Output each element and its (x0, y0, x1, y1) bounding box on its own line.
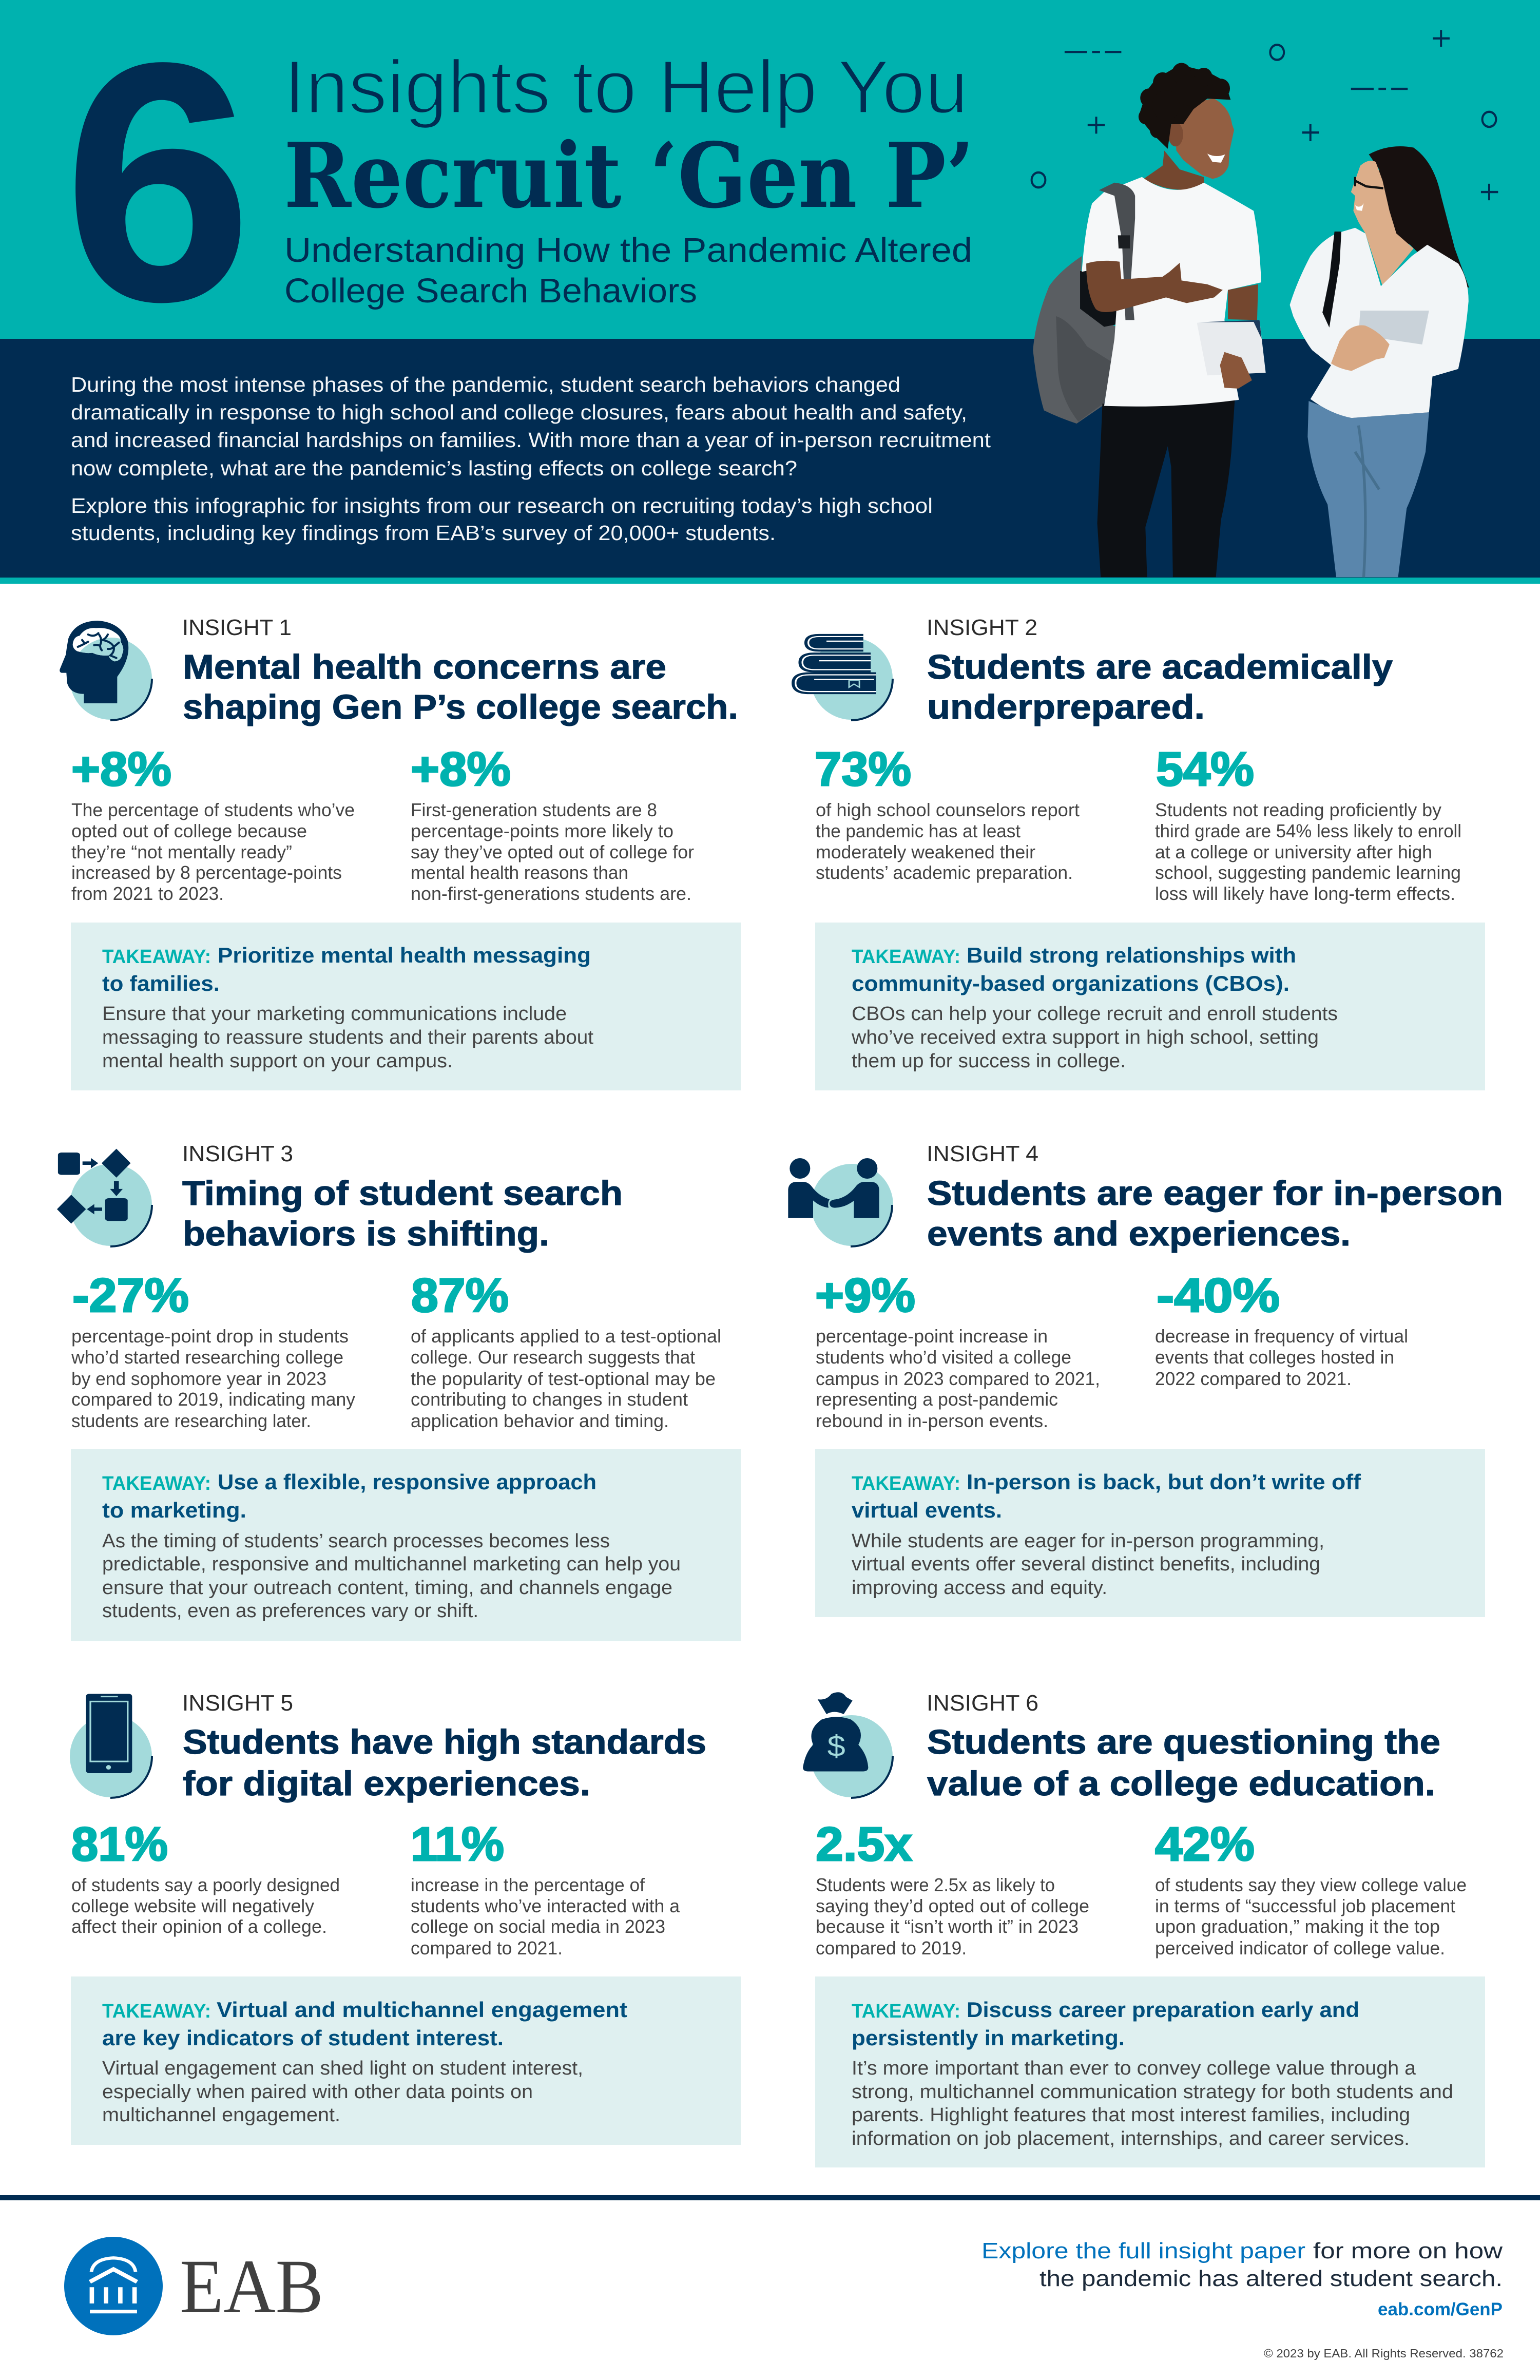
intro paragraph 1 (71, 373, 991, 480)
stat 2 description: compared to 2021. (411, 1937, 563, 1959)
stat 1: 81% (71, 1817, 168, 1871)
stat 2 (411, 742, 694, 904)
takeaway box: TAKEAWAY: (102, 946, 211, 968)
decorative marks (1032, 30, 1498, 248)
stat 2: 42% (1155, 1817, 1255, 1871)
heading: Students have high standards (183, 1723, 706, 1761)
intro paragraph 1: now complete, what are the pandemic’s lasting effects on college search? (71, 456, 797, 480)
panel: insight 5 (70, 1691, 741, 2145)
stat 2 description: 2022 compared to 2021. (1155, 1368, 1352, 1389)
takeaway box: As the timing of students’ search processes becomes less (102, 1530, 610, 1552)
heading (183, 648, 738, 726)
title line 1: Insights to Help You (284, 45, 968, 129)
takeaway box: them up for success in college. (852, 1050, 1126, 1072)
stat 2: -40% (1157, 1269, 1280, 1322)
stat 1 description: by end sophomore year in 2023 (71, 1368, 326, 1389)
stat 1 description: saying they’d opted out of college (816, 1895, 1089, 1916)
takeaway box: virtual events. (852, 1498, 1002, 1522)
stat 1 description: who’d started researching college (71, 1347, 343, 1368)
heading: underprepared. (927, 688, 1205, 726)
heading (183, 1723, 706, 1803)
takeaway box: It’s more important than ever to convey college value through a (852, 2058, 1416, 2079)
heading (182, 1174, 623, 1253)
stat 2 description (411, 799, 694, 904)
takeaway box (815, 1449, 1485, 1617)
stat 2 description (411, 1326, 721, 1431)
woman (1290, 146, 1469, 577)
footer call to action: Explore the full insight paper (981, 2238, 1305, 2263)
takeaway box (71, 923, 741, 1090)
takeaway box (815, 1976, 1485, 2167)
stat 2: 54% (1156, 742, 1254, 796)
takeaway box: Virtual engagement can shed light on student interest, (102, 2058, 583, 2079)
takeaway box: Prioritize mental health messaging (218, 943, 591, 967)
stat 2 description: mental health reasons than (411, 862, 628, 883)
heading: value of a college education. (927, 1764, 1435, 1803)
big numeral 6: 6 (64, 0, 252, 371)
intro paragraph 1: and increased financial hardships on families. With more than a year of in-person recruitment (71, 428, 991, 452)
stat 1 description (71, 1326, 355, 1431)
intro paragraph 2: Explore this infographic for insights from our research on recruiting today’s high school (71, 494, 933, 517)
stat 1 (71, 1817, 340, 1937)
subtitle (284, 231, 972, 310)
panel: insight 6 (803, 1691, 1485, 2167)
heading: behaviors is shifting. (183, 1215, 549, 1253)
heading (927, 1174, 1503, 1253)
takeaway box (71, 1449, 741, 1641)
footer call to action: for more on how (1313, 2238, 1503, 2263)
stat 1 description: Students were 2.5x as likely to (816, 1874, 1055, 1895)
stat 1 description: the pandemic has at least (816, 820, 1021, 841)
footer call to action: the pandemic has altered student search. (1040, 2266, 1503, 2291)
icon: money bag (803, 1692, 893, 1798)
stat 1 description: students’ academic preparation. (816, 862, 1073, 883)
stat 1 (71, 1269, 355, 1431)
title line 2: Recruit ‘Gen P’ (284, 124, 974, 228)
link: eab.com/GenP (1378, 2299, 1503, 2319)
stat 2 description (1155, 1326, 1408, 1389)
stat 2 description: First-generation students are 8 (411, 799, 657, 820)
stat 1: +8% (71, 742, 171, 796)
stat 1 description: of students say a poorly designed (71, 1874, 340, 1895)
stat 1 description: students are researching later. (71, 1410, 311, 1431)
heading: events and experiences. (927, 1215, 1351, 1253)
intro panel (0, 339, 1540, 584)
stat 2 description: upon graduation,” making it the top (1155, 1916, 1440, 1937)
icon: handshake (788, 1158, 893, 1246)
copyright: © 2023 by EAB. All Rights Reserved. 38762 (1264, 2347, 1504, 2360)
subtitle: Understanding How the Pandemic Altered (284, 231, 972, 270)
stat 2 description: at a college or university after high (1155, 841, 1432, 862)
stat 1 (815, 1269, 1100, 1431)
stat 2 (1155, 1269, 1408, 1389)
stat 1 (71, 742, 355, 904)
takeaway box: TAKEAWAY: (852, 1473, 960, 1494)
stat 2 description: Students not reading proficiently by (1155, 799, 1441, 820)
icon: head with brain (60, 621, 152, 720)
stat 1 description (816, 799, 1080, 883)
stat 1 description: representing a post-pandemic (816, 1389, 1058, 1410)
intro paragraph 2 (71, 494, 933, 545)
icon: building in blue circle (64, 2237, 163, 2335)
footer call to action (981, 2238, 1503, 2319)
takeaway box: predictable, responsive and multichannel marketing can help you (102, 1553, 681, 1575)
stat 1 description (816, 1326, 1100, 1431)
icon: money bag: $ (827, 1729, 845, 1762)
heading: Students are eager for in-person (927, 1174, 1503, 1213)
icon: flow chart (57, 1149, 152, 1246)
icon: smartphone (70, 1694, 152, 1798)
insight label: INSIGHT 4 (927, 1141, 1038, 1166)
heading (927, 648, 1393, 726)
insight label: INSIGHT 5 (182, 1691, 293, 1716)
insight label: INSIGHT 1 (182, 615, 292, 640)
panel: insight 4 (788, 1141, 1503, 1617)
takeaway box: parents. Highlight features that most interest families, including (852, 2104, 1410, 2126)
takeaway box (71, 1976, 741, 2145)
panel: insight 1 (60, 615, 741, 1090)
stat 1 description: compared to 2019. (816, 1937, 967, 1959)
takeaway box: Build strong relationships with (967, 943, 1296, 967)
stat 2 description: of applicants applied to a test-optional (411, 1326, 721, 1347)
stat 1: +9% (815, 1269, 915, 1322)
insight label: INSIGHT 3 (182, 1141, 293, 1166)
takeaway box: especially when paired with other data points on (102, 2081, 533, 2103)
intro paragraph 2: students, including key findings from EAB’s survey of 20,000+ students. (71, 521, 776, 545)
takeaway box: improving access and equity. (852, 1577, 1107, 1599)
takeaway box: virtual events offer several distinct benefits, including (852, 1553, 1320, 1575)
intro paragraph 1: During the most intense phases of the pandemic, student search behaviors changed (71, 373, 900, 396)
icon: stack of books (792, 634, 893, 720)
stat 1 description: percentage-point drop in students (71, 1326, 349, 1347)
wordmark: EAB (180, 2244, 323, 2329)
man (1033, 63, 1266, 577)
takeaway box: TAKEAWAY: (852, 2001, 960, 2022)
stat 2 description: say they’ve opted out of college for (411, 841, 694, 862)
takeaway box: who’ve received extra support in high school, setting (851, 1027, 1319, 1048)
stat 2: 87% (411, 1269, 509, 1322)
stat 2 description: third grade are 54% less likely to enroll (1155, 820, 1461, 841)
stat 1 (815, 742, 1080, 883)
stat 2 (1155, 742, 1461, 904)
takeaway box: Virtual and multichannel engagement (217, 1998, 627, 2022)
takeaway box: persistently in marketing. (852, 2026, 1125, 2050)
takeaway box: mental health support on your campus. (102, 1050, 453, 1072)
intro paragraph 1: dramatically in response to high school and college closures, fears about health and safety, (71, 400, 967, 424)
takeaway box: are key indicators of student interest. (102, 2026, 504, 2050)
stat 2 description: events that colleges hosted in (1155, 1347, 1394, 1368)
stat 2 description: college. Our research suggests that (411, 1347, 695, 1368)
takeaway box: TAKEAWAY: (102, 1473, 211, 1494)
panel: insight 3 (57, 1141, 741, 1641)
stat 2 (411, 1817, 680, 1959)
stat 2 description (1155, 799, 1461, 904)
stat 1 description: moderately weakened their (816, 841, 1035, 862)
stat 1 description: percentage-point increase in (816, 1326, 1048, 1347)
takeaway box: to families. (102, 971, 220, 995)
stat 2 description: of students say they view college value (1155, 1874, 1467, 1895)
stat 1: -27% (72, 1269, 189, 1322)
heading: shaping Gen P’s college search. (183, 688, 738, 726)
stat 2 description: students who’ve interacted with a (411, 1895, 680, 1916)
heading: Mental health concerns are (183, 648, 666, 686)
photo: two students (1032, 30, 1498, 577)
stat 2 description: the popularity of test-optional may be (411, 1368, 716, 1389)
stat 2 (1155, 1817, 1467, 1959)
stat 1 description: affect their opinion of a college. (71, 1916, 327, 1937)
takeaway box: community-based organizations (CBOs). (852, 971, 1289, 995)
takeaway box: students, even as preferences vary or shift. (102, 1600, 478, 1622)
takeaway box: information on job placement, internships, and career services. (852, 2128, 1410, 2149)
takeaway box: TAKEAWAY: (852, 946, 960, 968)
stat 2 description (411, 1874, 680, 1959)
stat 2 description: percentage-points more likely to (411, 820, 673, 841)
stat 1 (816, 1817, 1089, 1959)
takeaway box: Discuss career preparation early and (967, 1998, 1359, 2022)
stat 2 description (1155, 1874, 1467, 1959)
stat 1 description: campus in 2023 compared to 2021, (816, 1368, 1100, 1389)
takeaway box: Ensure that your marketing communications include (102, 1003, 567, 1025)
stat 2 description: contributing to changes in student (411, 1389, 688, 1410)
stat 1 description (71, 799, 355, 904)
stat 2 description: in terms of “successful job placement (1155, 1895, 1455, 1916)
heading: Timing of student search (182, 1174, 623, 1213)
stat 1 description (816, 1874, 1089, 1959)
takeaway box: Use a flexible, responsive approach (218, 1470, 596, 1494)
takeaway box: multichannel engagement. (102, 2104, 340, 2126)
stat 1: 2.5x (816, 1817, 912, 1871)
takeaway box: strong, multichannel communication strategy for both students and (852, 2081, 1453, 2103)
takeaway box: While students are eager for in-person programming, (852, 1530, 1324, 1552)
stat 2 description: application behavior and timing. (411, 1410, 669, 1431)
stat 2 description: loss will likely have long-term effects. (1155, 883, 1455, 904)
heading: for digital experiences. (183, 1764, 590, 1803)
stat 1: 73% (815, 742, 911, 796)
heading (927, 1723, 1440, 1803)
heading: Students are questioning the (927, 1723, 1440, 1761)
stat 1 description: because it “isn’t worth it” in 2023 (816, 1916, 1079, 1937)
takeaway box: CBOs can help your college recruit and enroll students (852, 1003, 1338, 1025)
takeaway box: to marketing. (102, 1498, 246, 1522)
takeaway box: TAKEAWAY: (102, 2001, 211, 2022)
insight label: INSIGHT 2 (927, 615, 1037, 640)
stat 1 description: of high school counselors report (816, 799, 1080, 820)
stat 2 description: college on social media in 2023 (411, 1916, 665, 1937)
takeaway box: ensure that your outreach content, timing, and channels engage (102, 1577, 672, 1599)
stat 2: +8% (411, 742, 511, 796)
stat 2 description: perceived indicator of college value. (1155, 1937, 1445, 1959)
stat 1 description: they’re “not mentally ready” (71, 841, 292, 862)
stat 2 description: school, suggesting pandemic learning (1155, 862, 1461, 883)
stat 2: 11% (411, 1817, 504, 1871)
stat 2 description: non-first-generations students are. (411, 883, 691, 904)
stat 2 (411, 1269, 721, 1431)
panel: insight 2 (792, 615, 1485, 1090)
stat 1 description: opted out of college because (71, 820, 307, 841)
stat 2 description: decrease in frequency of virtual (1155, 1326, 1408, 1347)
takeaway box: messaging to reassure students and their parents about (102, 1027, 593, 1048)
subtitle: College Search Behaviors (284, 272, 697, 310)
stat 1 description: students who’d visited a college (816, 1347, 1071, 1368)
takeaway box: In-person is back, but don’t write off (967, 1470, 1361, 1494)
stat 1 description: from 2021 to 2023. (71, 883, 224, 904)
stat 2 description: increase in the percentage of (411, 1874, 645, 1895)
stat 1 description: college website will negatively (71, 1895, 314, 1916)
stat 1 description: rebound in in-person events. (816, 1410, 1048, 1431)
stat 1 description: increased by 8 percentage-points (71, 862, 342, 883)
takeaway box (815, 923, 1485, 1090)
header banner (0, 0, 1540, 371)
heading: Students are academically (927, 648, 1393, 686)
stat 1 description: The percentage of students who’ve (71, 799, 355, 820)
stat 1 description: compared to 2019, indicating many (71, 1389, 355, 1410)
stat 1 description (71, 1874, 340, 1937)
footer logo: EAB (64, 2237, 323, 2335)
insight label: INSIGHT 6 (927, 1691, 1038, 1716)
